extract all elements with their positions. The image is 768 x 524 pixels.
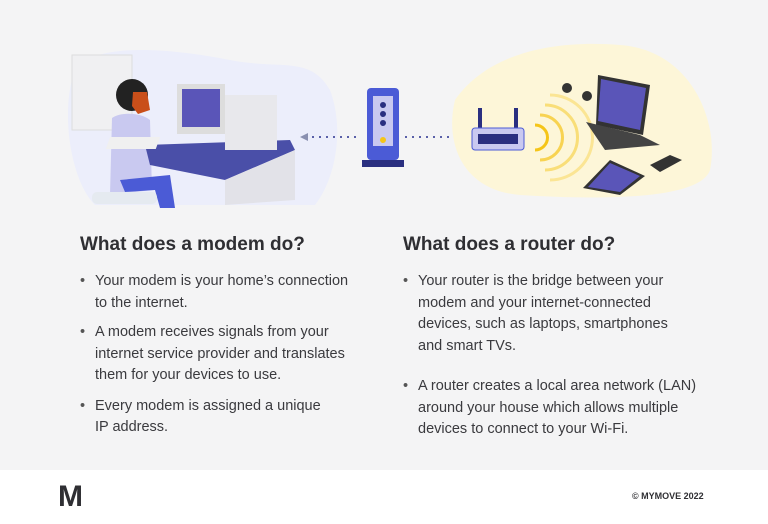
router [478, 108, 482, 128]
bullets: modem [80, 273, 348, 435]
bullets: router: Your router is the bridge between your [418, 273, 663, 289]
heading: modem: What does a modem do? [80, 234, 305, 255]
bullets: modem: A modem receives signals from your [95, 324, 329, 340]
bullets: router: around your house which allows multiple [418, 400, 678, 416]
blob: router side [452, 44, 712, 197]
illustration: person at computer [72, 44, 712, 208]
bullets: modem: to the internet. [95, 294, 188, 310]
bullets: modem: Your modem is your home’s connection [95, 273, 348, 289]
devices [596, 75, 650, 135]
arrows [300, 133, 308, 141]
bullets: modem: internet service provider and translates [95, 346, 345, 362]
heading: router: What does a router do? [403, 234, 615, 255]
wifi waves [535, 95, 592, 180]
logo: M [58, 480, 83, 513]
bullets: router: devices, such as laptops, smartphones [418, 316, 668, 332]
bullets: router: A router creates a local area network (LAN) [418, 378, 696, 394]
monitor [177, 84, 225, 134]
desk [145, 140, 295, 180]
modem [362, 88, 404, 167]
copyright: © MYMOVE 2022 [632, 491, 704, 501]
bullets: modem: them for your devices to use. [95, 367, 281, 383]
window [72, 55, 132, 130]
bullets: router: devices to connect to your Wi-Fi. [418, 421, 628, 437]
person [92, 79, 175, 208]
blob: modem side [68, 50, 337, 205]
bullets: router [404, 273, 696, 437]
bullets: router: and smart TVs. [418, 338, 516, 354]
bullets: modem: Every modem is assigned a unique [95, 398, 321, 414]
bullets: router: modem and your internet-connected [418, 294, 651, 310]
bullets: modem: IP address. [95, 419, 168, 435]
